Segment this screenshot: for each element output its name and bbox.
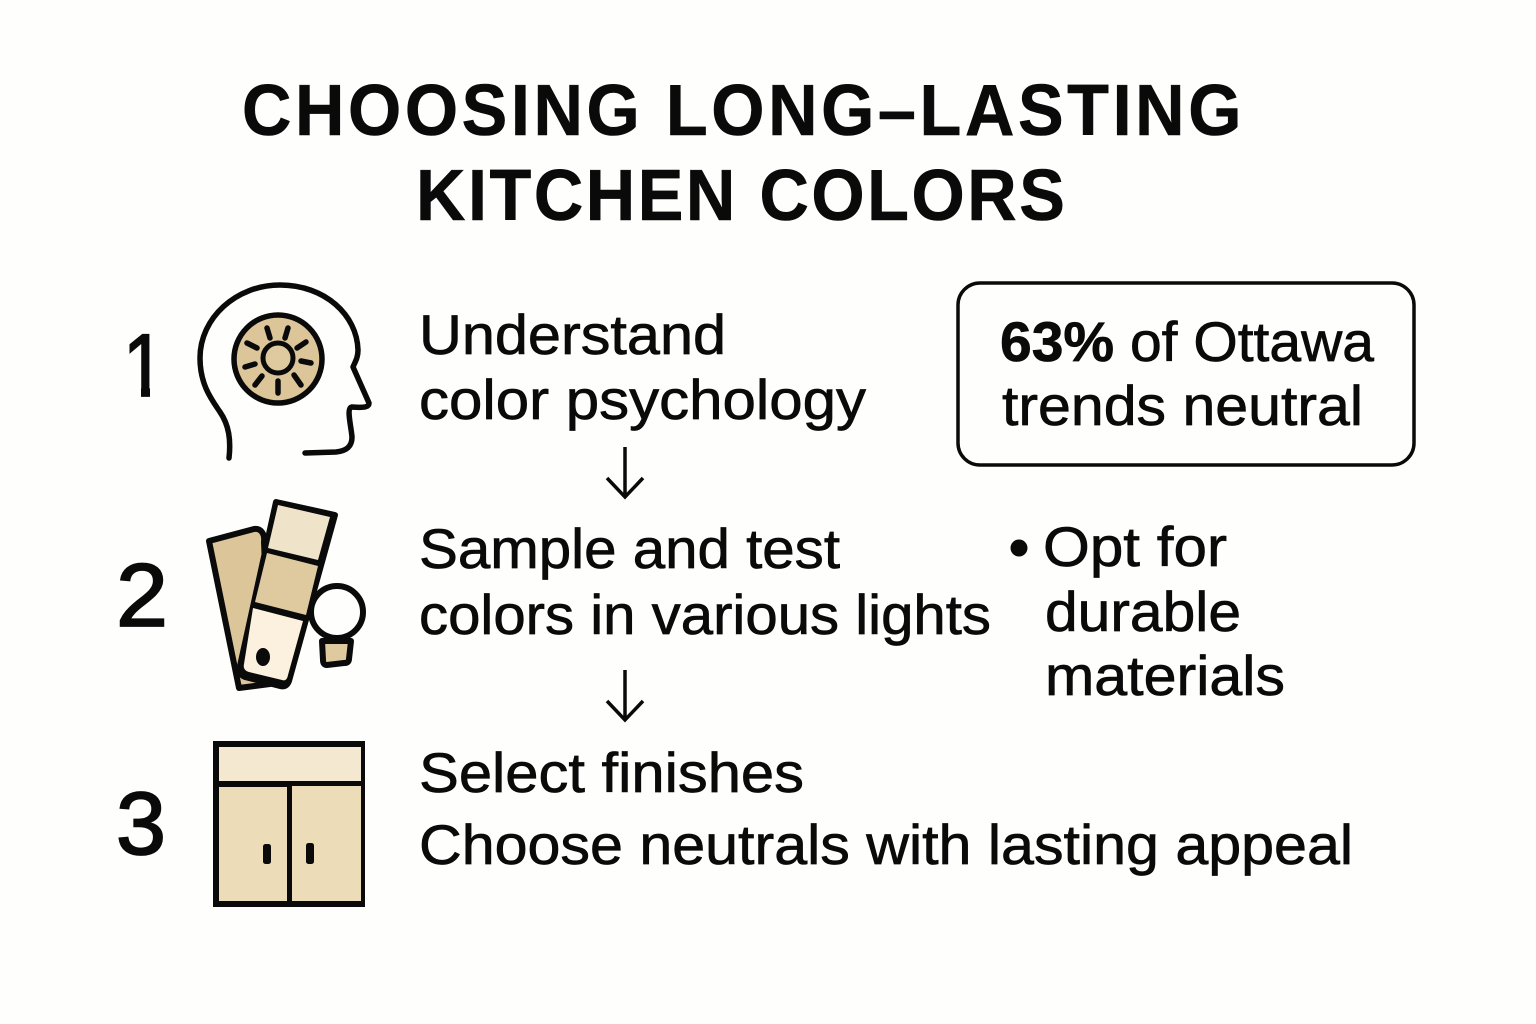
bullet: opt for durable materials: materials	[1045, 644, 1285, 707]
step 1 text: Understand	[419, 303, 726, 366]
bullet: opt for durable materials: durable	[1045, 580, 1241, 643]
step number 3: 3	[116, 773, 166, 873]
step 1 text	[419, 303, 866, 431]
step 2 text: colors in various lights	[419, 583, 991, 646]
icon: kitchen cabinet	[213, 741, 365, 907]
bullet: opt for durable materials	[1010, 515, 1285, 707]
step 2 text	[419, 517, 991, 646]
callout: 63% of Ottawa trends neutral: trends neutral	[1002, 374, 1363, 437]
title	[242, 69, 1241, 235]
step 2 text: Sample and test	[419, 517, 840, 580]
step 3 text	[419, 741, 1353, 876]
title: KITCHEN COLORS	[416, 154, 1065, 235]
icon: colour swatches and bulb	[209, 502, 363, 688]
callout: 63% of Ottawa trends neutral: 63% of Ottawa	[1000, 310, 1375, 373]
step 3 text: Choose neutrals with lasting appeal	[419, 813, 1353, 876]
title: CHOOSING LONG–LASTING	[242, 69, 1241, 150]
bullet: opt for durable materials: Opt for	[1043, 515, 1227, 578]
callout: 63% of Ottawa trends neutral	[958, 283, 1414, 465]
step number 2: 2	[116, 545, 168, 645]
step 1 text: color psychology	[419, 368, 866, 431]
step 3 text: Select finishes	[419, 741, 804, 804]
icon: head with sun	[200, 285, 369, 458]
step number 1: 1	[123, 315, 165, 415]
arrow: step 2 to step 3	[607, 670, 643, 720]
arrow: step 1 to step 2	[607, 447, 643, 497]
